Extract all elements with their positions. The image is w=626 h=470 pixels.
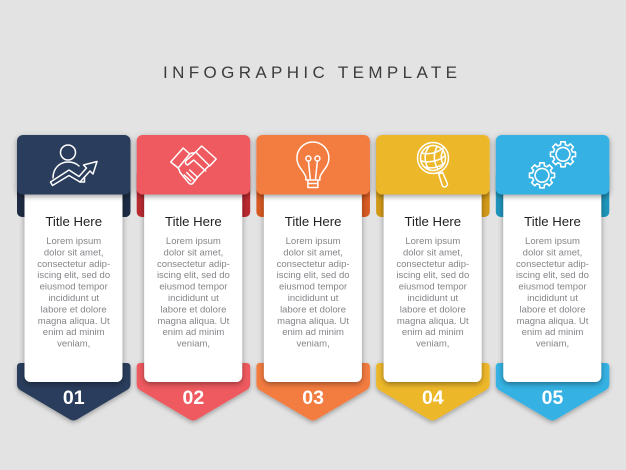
body text: enim ad minim [402, 327, 464, 338]
panel: step 01 [17, 135, 130, 420]
step number: 03 [302, 387, 324, 409]
icon: gears [529, 142, 576, 188]
body text: Lorem ipsum [166, 236, 221, 247]
body text: magna aliqua. Ut [157, 316, 230, 327]
body text: consectetur adip- [396, 259, 469, 270]
body text: eiusmod tempor [159, 282, 227, 293]
step number: 01 [63, 387, 85, 409]
step number: 04 [422, 387, 444, 409]
panel: step 05 [496, 135, 609, 420]
body text: veniam, [536, 339, 569, 350]
body text: magna aliqua. Ut [277, 316, 349, 327]
body text: dolor sit amet, [44, 247, 104, 258]
white card [24, 180, 122, 382]
icon: globe magnifier [418, 142, 448, 187]
back tab [137, 170, 250, 217]
step title: Title Here [285, 214, 341, 229]
body text: iscing elit, sed do [396, 270, 469, 281]
body text: dolor sit amet, [403, 247, 463, 258]
body text: iscing elit, sed do [37, 270, 110, 281]
body text: magna aliqua. Ut [38, 316, 110, 327]
body text: Lorem ipsum [286, 236, 341, 247]
header block [376, 135, 490, 194]
header block [137, 135, 250, 194]
white card [264, 180, 362, 382]
body text: veniam, [296, 339, 330, 350]
body text: consectetur adip- [157, 259, 230, 270]
body text: incididunt ut [168, 293, 219, 304]
step title: Title Here [165, 214, 222, 229]
body text: magna aliqua. Ut [397, 316, 469, 327]
body text: iscing elit, sed do [277, 270, 350, 281]
body text: eiusmod tempor [399, 282, 467, 293]
number arrow 03 [256, 363, 370, 420]
body text: incididunt ut [527, 293, 578, 304]
step number: 05 [542, 387, 563, 409]
panel: step 02 [137, 135, 250, 420]
body text: incididunt ut [48, 293, 99, 304]
body text: labore et dolore [519, 304, 586, 315]
step number: 02 [183, 387, 204, 409]
back tab [496, 170, 609, 217]
back tab [376, 170, 490, 217]
body text: dolor sit amet, [164, 247, 223, 258]
header block [496, 135, 609, 194]
body text: magna aliqua. Ut [517, 316, 589, 327]
white card [503, 180, 601, 382]
body text: dolor sit amet, [523, 247, 582, 258]
header block [256, 135, 370, 194]
back tab [256, 170, 370, 217]
body text: iscing elit, sed do [516, 270, 589, 281]
icon: person with rising arrow [50, 145, 97, 186]
title: INFOGRAPHIC TEMPLATE [163, 63, 457, 82]
body text: Lorem ipsum [46, 236, 101, 247]
body text: incididunt ut [407, 293, 459, 304]
body text: veniam, [416, 339, 449, 350]
body text: consectetur adip- [277, 259, 350, 270]
body text: labore et dolore [160, 304, 226, 315]
body text: eiusmod tempor [40, 282, 108, 293]
body text: enim ad minim [163, 327, 224, 338]
body text: labore et dolore [400, 304, 466, 315]
panel: step 04 [376, 135, 490, 420]
body text: enim ad minim [522, 327, 583, 338]
number arrow 04 [376, 363, 490, 420]
body text: eiusmod tempor [279, 282, 347, 293]
body text: eiusmod tempor [518, 282, 587, 293]
icon: handshake [171, 146, 216, 184]
number arrow 02 [137, 363, 250, 420]
white card [144, 180, 242, 382]
step title: Title Here [45, 214, 102, 229]
body text: labore et dolore [41, 304, 107, 315]
body text: Lorem ipsum [405, 236, 460, 247]
body text: labore et dolore [280, 304, 346, 315]
number arrow 01 [17, 363, 130, 420]
body text: enim ad minim [43, 327, 105, 338]
header block [17, 135, 130, 194]
body text: veniam, [177, 339, 210, 350]
step title: Title Here [404, 214, 461, 229]
body text: dolor sit amet, [283, 247, 343, 258]
body text: enim ad minim [282, 327, 344, 338]
body text: iscing elit, sed do [157, 270, 230, 281]
panel: step 03 [256, 135, 370, 420]
body text: incididunt ut [288, 293, 339, 304]
back tab [17, 170, 130, 217]
step title: Title Here [524, 214, 581, 229]
number arrow 05 [496, 363, 609, 420]
icon: light bulb [297, 142, 329, 188]
white card [384, 180, 482, 382]
body text: Lorem ipsum [525, 236, 580, 247]
body text: consectetur adip- [516, 259, 589, 270]
body text: consectetur adip- [37, 259, 110, 270]
body text: veniam, [57, 339, 90, 350]
